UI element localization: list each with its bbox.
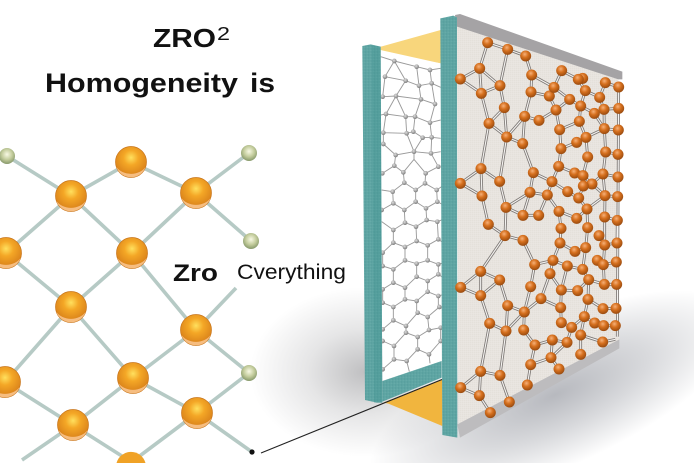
title: ZRO2 Homogeneity is: is <box>250 68 275 98</box>
title: ZRO2 Homogeneity is <box>45 23 275 98</box>
lattice bonds <box>5 153 252 460</box>
yellow top plate <box>381 30 441 63</box>
3D membrane panel <box>362 14 624 438</box>
back mesh <box>379 50 443 382</box>
title: ZRO2 Homogeneity is: ZRO <box>153 23 216 53</box>
orange atoms <box>455 37 624 418</box>
orange network bonds <box>460 43 619 413</box>
front teal frame post <box>440 16 457 438</box>
back teal frame <box>362 44 442 403</box>
title: ZRO2 Homogeneity is: 2 <box>217 24 230 44</box>
label: Zro Cverything: Cverything <box>237 261 346 284</box>
grey bottom edge <box>457 339 619 438</box>
label: Zro Cverything <box>173 260 346 287</box>
lattice atoms <box>0 145 259 463</box>
grey top edge <box>455 14 622 79</box>
title: ZRO2 Homogeneity is: Homogeneity <box>45 68 238 98</box>
molecular lattice diagram <box>0 145 259 463</box>
yellow bottom plate <box>383 379 442 426</box>
main panel face <box>457 25 619 425</box>
background shadow <box>240 270 694 463</box>
label: Zro Cverything: Zro <box>173 260 218 287</box>
pointer line with dot <box>249 380 442 455</box>
